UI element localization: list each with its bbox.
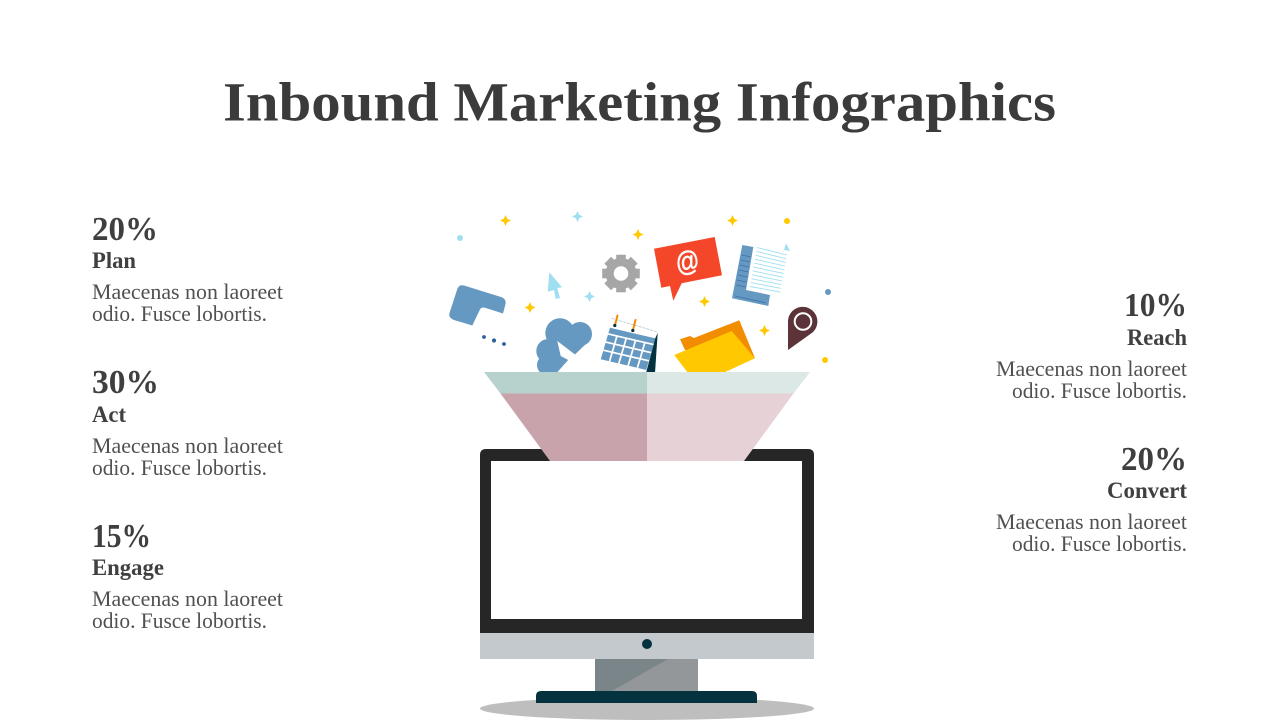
title: Inbound Marketing Infographics bbox=[223, 72, 1056, 132]
text block: Convert 20%: odio. Fusce lobortis. bbox=[1012, 531, 1187, 556]
monitor bezel bbox=[480, 449, 814, 633]
icon: gear bbox=[602, 255, 640, 292]
text block: Plan 20% bbox=[92, 211, 283, 326]
icon: decorative dots bbox=[457, 218, 831, 363]
text block: Convert 20% bbox=[996, 441, 1187, 556]
text block: Act 30%: Act bbox=[92, 402, 126, 427]
icon: at-sign speech bubble bbox=[654, 237, 722, 301]
monitor bbox=[480, 449, 814, 720]
text block: Reach 10% bbox=[996, 287, 1187, 403]
text block: Reach 10%: Maecenas non laoreet bbox=[996, 356, 1187, 381]
icon: blue tag bbox=[449, 285, 506, 326]
text block: Engage 15%: Engage bbox=[92, 555, 164, 580]
ground shadow bbox=[480, 697, 814, 720]
text block: Act 30%: Maecenas non laoreet bbox=[92, 433, 283, 458]
icon: cursor arrow bbox=[548, 272, 562, 299]
text block: Act 30% bbox=[92, 364, 283, 480]
monitor chin bbox=[480, 633, 814, 659]
icon: cyan sparkles bbox=[572, 211, 595, 302]
text block: Convert 20%: Maecenas non laoreet bbox=[996, 509, 1187, 534]
text block: Plan 20%: Maecenas non laoreet bbox=[92, 279, 283, 304]
text block: Plan 20%: Plan bbox=[92, 248, 136, 273]
text block: Act 30%: odio. Fusce lobortis. bbox=[92, 455, 267, 480]
icon: document bbox=[732, 243, 790, 306]
stand base bbox=[536, 691, 757, 703]
text block: Plan 20%: odio. Fusce lobortis. bbox=[92, 301, 267, 326]
text block: Plan 20%: 20% bbox=[92, 211, 158, 248]
text block: Engage 15%: Maecenas non laoreet bbox=[92, 586, 283, 611]
text block: Reach 10%: Reach bbox=[1127, 325, 1187, 350]
icon: yellow sparkles bbox=[500, 215, 770, 336]
text block: Engage 15% bbox=[92, 518, 283, 633]
icon: cloud with arrow bbox=[536, 318, 592, 375]
text block: Engage 15%: odio. Fusce lobortis. bbox=[92, 608, 267, 633]
power button bbox=[642, 639, 652, 649]
icon: location pin bbox=[788, 307, 817, 350]
stand bbox=[595, 659, 698, 691]
funnel bbox=[484, 372, 810, 461]
text block: Act 30%: 30% bbox=[92, 364, 159, 401]
text block: Reach 10%: odio. Fusce lobortis. bbox=[1012, 378, 1187, 403]
icon: calendar bbox=[601, 316, 658, 373]
text block: Reach 10%: 10% bbox=[1124, 287, 1187, 324]
text block: Convert 20%: Convert bbox=[1107, 478, 1187, 503]
icon: at-sign speech bubble: @ bbox=[673, 244, 702, 279]
text block: Convert 20%: 20% bbox=[1121, 441, 1187, 478]
icon: folder bbox=[674, 320, 755, 373]
text block: Engage 15%: 15% bbox=[92, 518, 151, 555]
monitor screen bbox=[491, 461, 802, 619]
